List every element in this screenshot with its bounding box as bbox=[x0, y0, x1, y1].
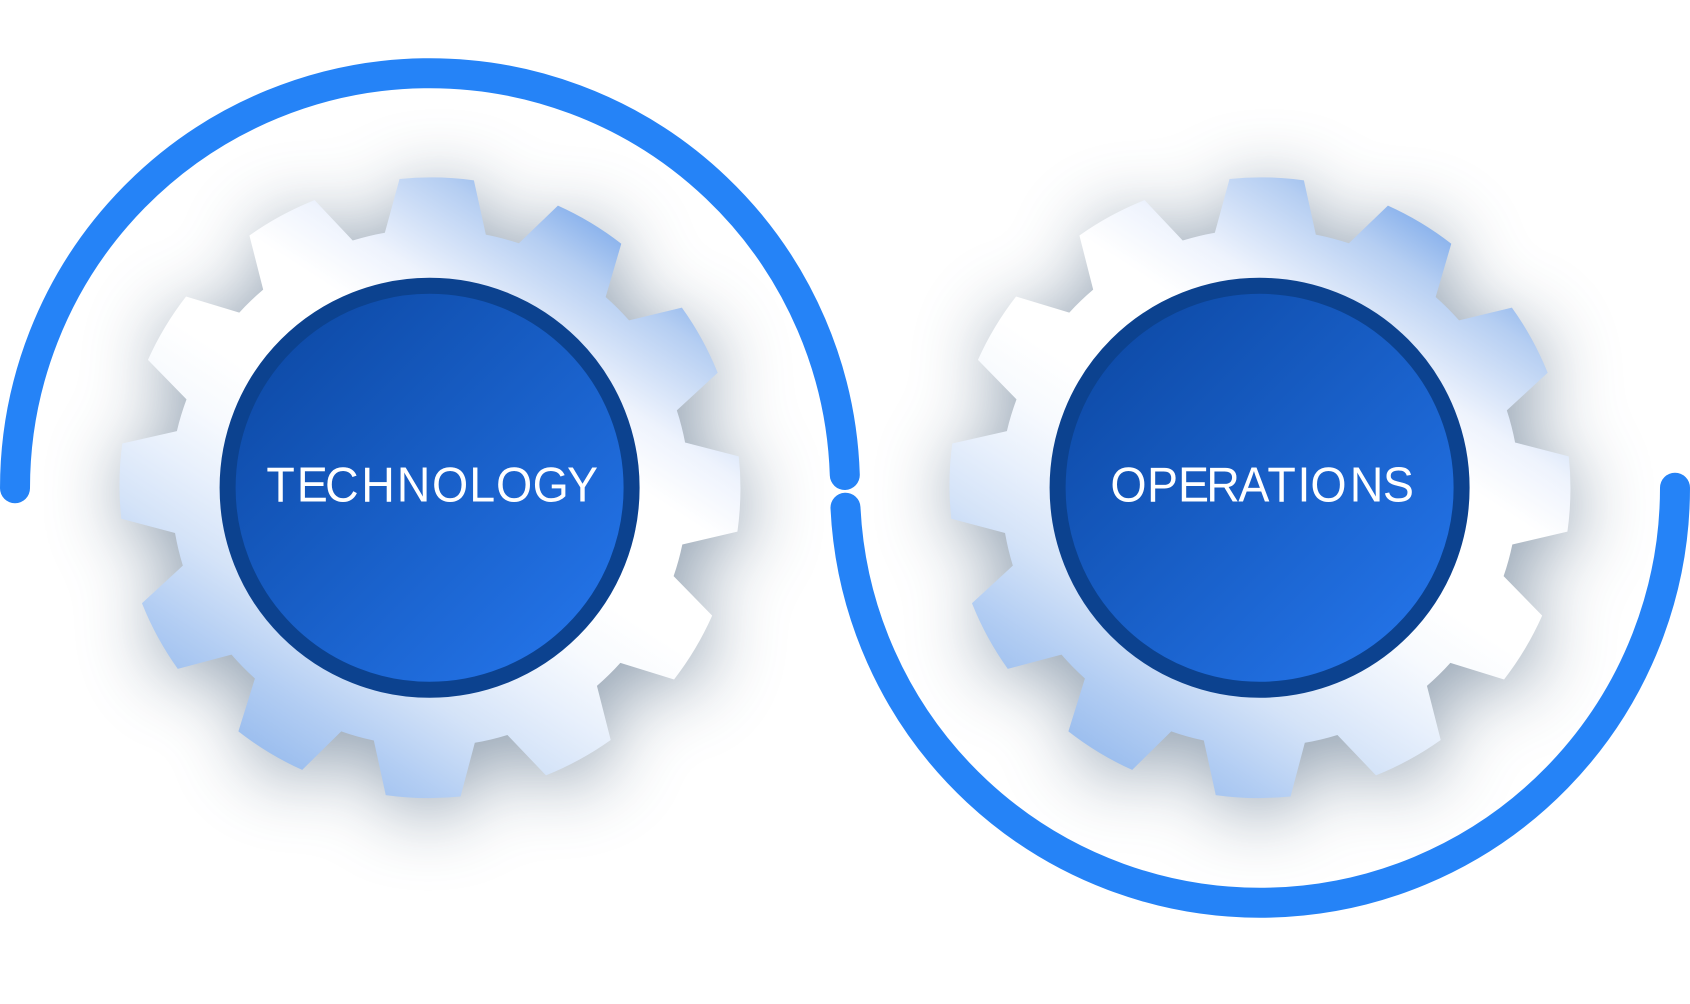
arc: upper arrow around technology bbox=[15, 73, 845, 488]
arc: lower arrow around operations bbox=[845, 488, 1675, 903]
hub: technology bbox=[228, 286, 632, 690]
label: technology: TECHNOLOGY bbox=[266, 459, 598, 513]
label: operations: OPERATIONS bbox=[1110, 459, 1414, 513]
gear: technology bbox=[119, 177, 740, 798]
gear: operations bbox=[949, 177, 1570, 798]
hub: operations bbox=[1058, 286, 1462, 690]
